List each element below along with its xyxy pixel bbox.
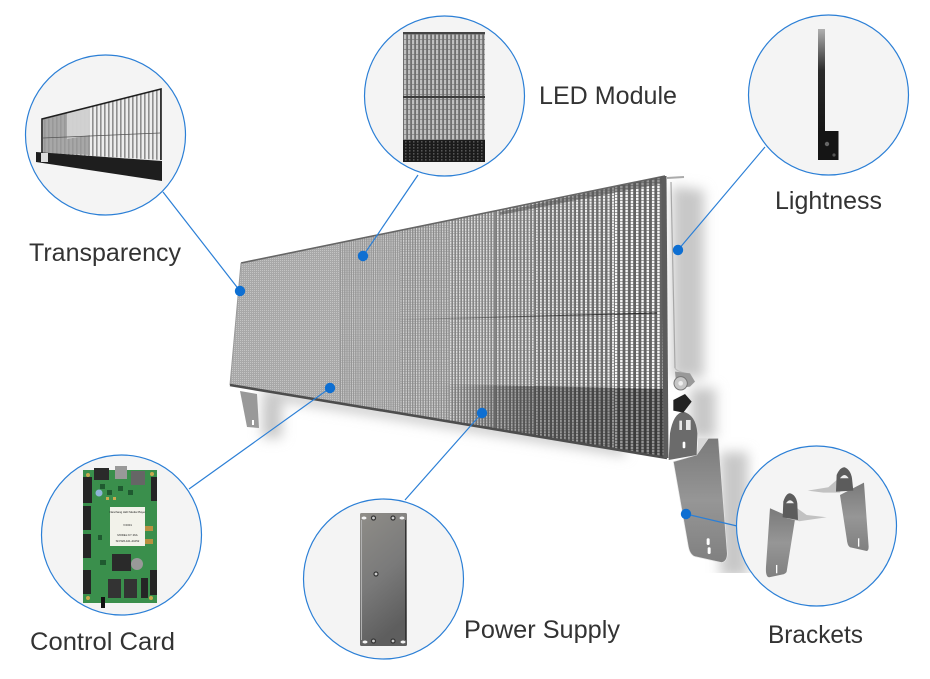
thumbnail: slim side profile bbox=[818, 29, 838, 160]
main transparent LED display bbox=[225, 170, 727, 563]
label: Control Card: Control Card bbox=[30, 628, 175, 656]
label: Lightness: Lightness bbox=[775, 187, 882, 215]
card label text bbox=[109, 510, 146, 543]
card label text: MODEL:KY 26A bbox=[117, 533, 138, 537]
label: Brackets: Brackets bbox=[768, 621, 863, 649]
label: Power Supply: Power Supply bbox=[464, 616, 621, 644]
thumbnail: display side view bbox=[36, 89, 162, 181]
circle: transparency bbox=[26, 55, 186, 215]
circle: LED module bbox=[364, 16, 524, 176]
thumbnail: two brackets bbox=[766, 467, 869, 577]
leader line: lightness bbox=[673, 147, 765, 255]
main display shadows bbox=[262, 186, 748, 577]
thumbnail: control card PCB bbox=[83, 466, 157, 608]
leader line: control card bbox=[189, 383, 335, 489]
right mounting bracket bbox=[669, 372, 727, 563]
leader line: transparency bbox=[163, 192, 245, 296]
label: Transparency: Transparency bbox=[29, 239, 181, 267]
leader line: brackets bbox=[681, 509, 737, 526]
leader line: LED module bbox=[358, 175, 418, 261]
leader line: power supply bbox=[405, 408, 487, 500]
circle: control card bbox=[42, 455, 202, 615]
card label text: V:0001 bbox=[123, 523, 132, 527]
circle: power supply bbox=[304, 499, 464, 659]
card label text: SN:526-421-41052 bbox=[116, 539, 140, 543]
card label text: Nanchang LED Media Player bbox=[109, 510, 146, 514]
circle: lightness bbox=[748, 15, 908, 175]
left bracket bbox=[240, 391, 259, 428]
panel frame bbox=[230, 176, 690, 458]
thumbnail: power supply plate bbox=[360, 513, 407, 646]
circle: brackets bbox=[736, 446, 896, 606]
thumbnail: LED module bbox=[403, 32, 485, 162]
label: LED Module: LED Module bbox=[539, 82, 677, 110]
panel mesh bbox=[225, 170, 670, 465]
